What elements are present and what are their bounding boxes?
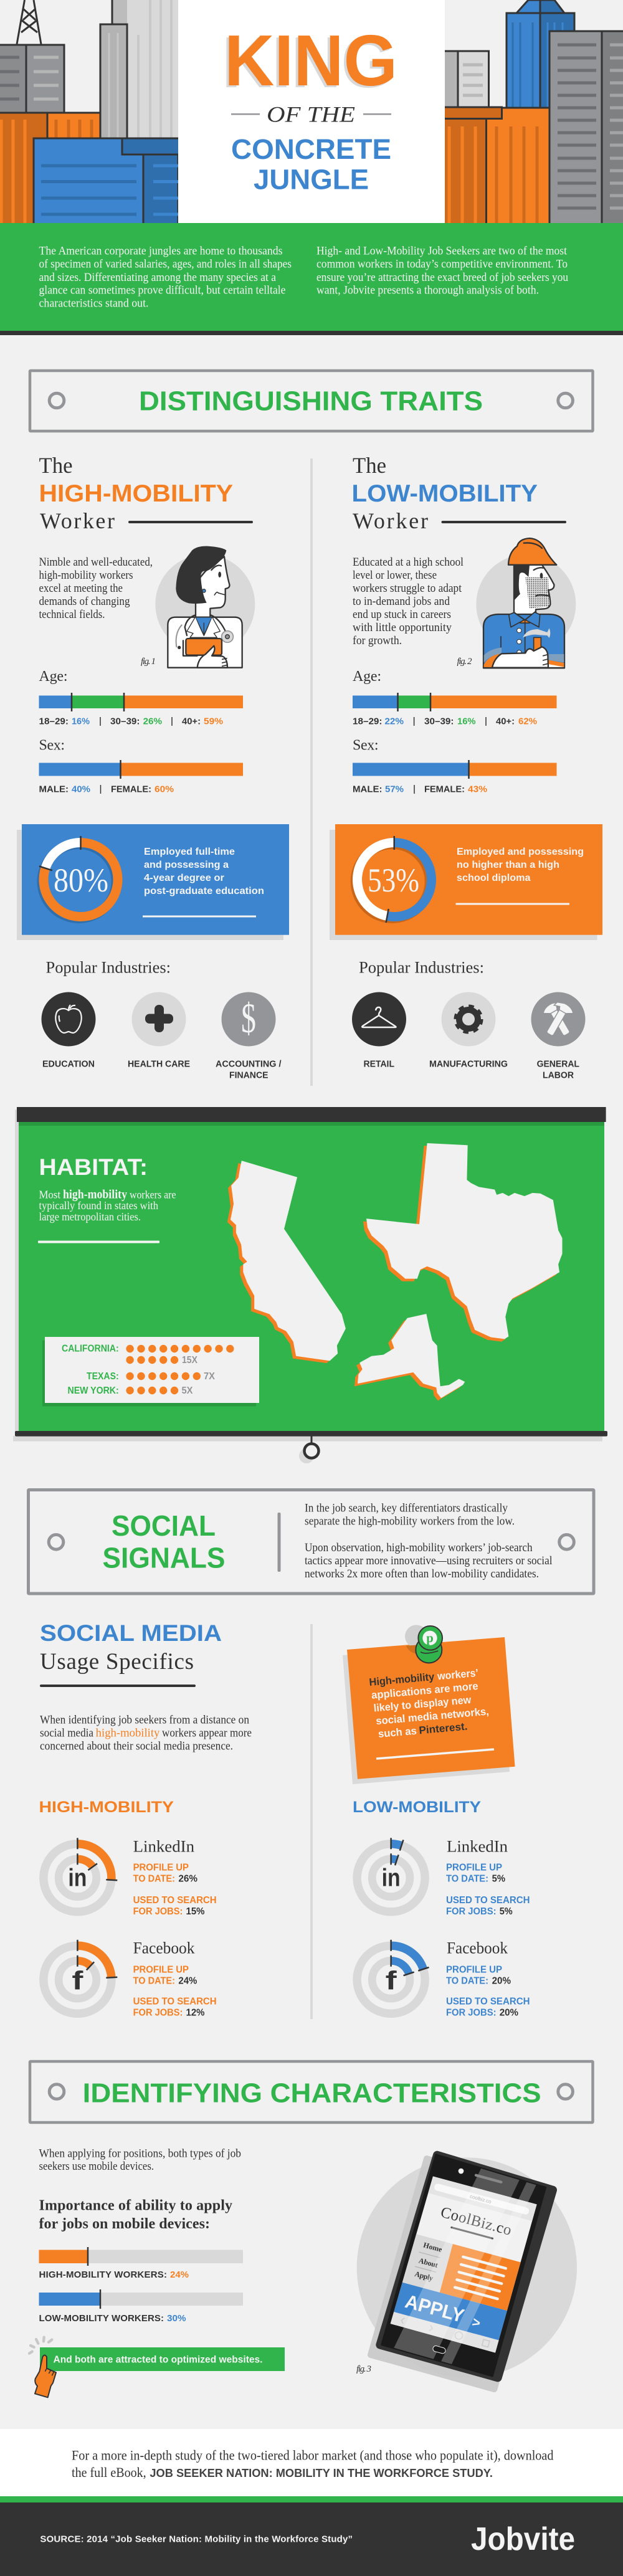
chart: high-mobility age: 40+: (182, 716, 201, 726)
text: low-mobility description (353, 556, 464, 647)
chart: low-mobility age (353, 668, 557, 726)
icon: pointing hand (29, 2337, 56, 2397)
donut: 53% (355, 836, 431, 923)
icon: construction worker illustration (476, 538, 576, 668)
stats: low-mobility linkedin: TO DATE: (446, 1874, 488, 1884)
text: diploma (457, 847, 584, 883)
text: social signals description (305, 1503, 552, 1580)
chart: low-mobility age: Age: (353, 668, 381, 685)
stats: high-mobility linkedin: TO DATE: (133, 1874, 175, 1884)
title: concrete jungle: CONCRETE (231, 133, 391, 165)
panel: social signals box (29, 1490, 594, 1594)
text: low-mobility description: level or lower, these (353, 569, 437, 582)
chart: mobile importance bars: LOW-MOBILITY WORKERS: (39, 2313, 164, 2324)
donut: 53%: 53% (368, 862, 419, 899)
chart: high-mobility age: 59% (204, 716, 223, 726)
icon: accounting dollar (222, 992, 275, 1047)
callout: optimized websites: And both are attracted to optimized websites. (54, 2355, 263, 2365)
gauge: low-mobility facebook (357, 1940, 429, 2013)
icon: manufacturing gear (441, 992, 496, 1047)
phone screen: > (470, 2314, 482, 2331)
industry labels right: GENERAL (537, 1060, 579, 1070)
stats: low-mobility facebook: 20% (492, 1976, 511, 1987)
stats: low-mobility linkedin: 5% (500, 1906, 513, 1917)
stats: high-mobility linkedin: USED TO SEARCH (133, 1895, 217, 1906)
text: social media description: When identifying job seekers from a distance on (40, 1714, 249, 1727)
industry labels right: RETAIL (364, 1060, 394, 1070)
gauge: high-mobility facebook (44, 1940, 117, 2013)
text: low-mobility description: Educated at a high school (353, 556, 464, 569)
caption: fig 1: fig. 1 (141, 657, 156, 667)
intro green band (0, 223, 623, 335)
icon: pinterest pin (405, 1625, 442, 1663)
icon: retail hanger (352, 992, 406, 1047)
legend: state counts: 5X (182, 1385, 193, 1396)
heading: social media usage specifics: Usage Specifics (40, 1649, 194, 1675)
panel: call to action: the full eBook, (72, 2464, 146, 2480)
text: note (369, 1666, 490, 1741)
legend: state counts: NEW YORK: (67, 1385, 119, 1396)
donut: 80% (39, 836, 118, 918)
text: high-mobility description: Nimble and well-educated, (39, 556, 153, 569)
header cityscape right (443, 0, 623, 226)
chart: high-mobility sex: MALE: (39, 784, 69, 794)
chart: mobile importance bars: HIGH-MOBILITY WORKERS: (39, 2269, 167, 2280)
panel: call to action: For a more in-depth study of the two-tiered labor market (and those who populate it), download (72, 2448, 553, 2463)
text: low-mobility description: with little opportunity (353, 622, 452, 634)
text: mobile intro (39, 2147, 241, 2173)
legend: state counts: 15X (182, 1355, 198, 1366)
chart: high-mobility age: 30–39: (110, 716, 140, 726)
text: social media description (40, 1714, 252, 1753)
text: high-mobility description: high-mobility workers (39, 569, 133, 582)
heading box: distinguishing traits (30, 371, 593, 431)
text: note: likely to display new (373, 1694, 472, 1714)
phone screen (390, 2177, 537, 2353)
stats: low-mobility facebook: 20% (500, 2008, 518, 2018)
intro text left: glance can sometimes prove difficult, but certain telltale (39, 284, 285, 297)
heading: the low-mobility worker: Worker (353, 508, 428, 533)
text: note: workers’ (436, 1667, 479, 1682)
map: texas (363, 1143, 562, 1342)
icon: general labor hammers (531, 992, 586, 1047)
heading: popular industries right: Popular Industries: (359, 959, 484, 977)
phone screen: coolbiz.co (469, 2193, 492, 2205)
title panel: KING (222, 22, 395, 103)
stats: high-mobility facebook: TO DATE: (133, 1976, 175, 1987)
icon: accounting dollar: $ (241, 994, 256, 1042)
stats: low-mobility linkedin: 5% (492, 1874, 505, 1884)
chart: high-mobility sex: Sex: (39, 738, 65, 754)
intro text right: common workers in today’s competitive environment. To (316, 258, 568, 270)
legend: state counts: 7X (204, 1371, 216, 1382)
chart: low-mobility age: 16% (457, 716, 476, 726)
heading box: identifying characteristics (30, 2061, 593, 2122)
legend: state counts (42, 1337, 259, 1407)
text: low-mobility description: workers struggle to adapt (353, 582, 462, 595)
intro text left: The American corporate jungles are home to thousands (39, 245, 283, 258)
industry labels right: MANUFACTURING (429, 1060, 508, 1070)
chart: low-mobility age: 30–39: (424, 716, 454, 726)
text: education: 4-year degree or (144, 873, 224, 883)
text: high-mobility description (39, 556, 153, 621)
icon: phone illustration (357, 2155, 577, 2389)
legend: state counts: TEXAS: (87, 1371, 119, 1382)
icon: education apple (41, 992, 96, 1047)
chart: mobile importance bars: 30% (167, 2313, 186, 2324)
text: social media description: concerned about their social media presence. (40, 1741, 233, 1753)
text: education (144, 847, 264, 896)
stats: low-mobility linkedin: PROFILE UP (446, 1863, 502, 1873)
text: habitat description: workers are (130, 1188, 176, 1200)
stats: low-mobility facebook: USED TO SEARCH (446, 1997, 530, 2007)
chart: low-mobility sex: FEMALE: (424, 784, 465, 794)
chart: low-mobility sex: 43% (468, 784, 487, 794)
text: note: applications are more (371, 1680, 478, 1701)
callout: pinterest note (343, 1625, 515, 1784)
text: diploma: Employed and possessing (457, 847, 584, 857)
stats: high-mobility facebook: FOR JOBS: (133, 2008, 183, 2018)
text: habitat description: high-mobility (63, 1187, 127, 1201)
gauge: high-mobility facebook: f (72, 1966, 84, 1995)
intro text left: characteristics stand out. (39, 298, 148, 310)
icon: pinterest pin: p (426, 1632, 434, 1645)
stats: low-mobility linkedin: USED TO SEARCH (446, 1895, 530, 1906)
panel: 53% diploma (330, 824, 602, 940)
chart: low-mobility age: 62% (518, 716, 537, 726)
intro text right: High- and Low-Mobility Job Seekers are two of the most (316, 245, 568, 258)
chart: high-mobility sex: 40% (72, 784, 90, 794)
text: social signals description: separate the high-mobility workers from the low. (305, 1516, 515, 1528)
phone screen: APPLY (403, 2291, 467, 2327)
heading: the low-mobility worker: The (353, 453, 386, 478)
text: mobile intro: When applying for positions, both types of job (39, 2147, 241, 2160)
map: california (227, 1161, 346, 1363)
heading: the high-mobility worker (39, 453, 253, 533)
heading: low-mobility social: LOW-MOBILITY (353, 1799, 481, 1816)
text: habitat description: Most (39, 1188, 60, 1200)
chart: low-mobility sex (353, 738, 557, 794)
stats: low-mobility linkedin (446, 1838, 530, 1917)
phone glare (394, 2167, 537, 2366)
heading box: identifying characteristics: IDENTIFYING CHARACTERISTICS (83, 2078, 541, 2108)
chart: low-mobility age: 22% (384, 716, 404, 726)
stats: low-mobility facebook: TO DATE: (446, 1976, 488, 1987)
gauge: low-mobility linkedin: in (382, 1864, 401, 1891)
stats: high-mobility facebook: 24% (178, 1976, 197, 1987)
text: note: social media networks, (376, 1705, 490, 1727)
title: of the: OF THE (267, 102, 355, 127)
text: mobile intro: seekers use mobile devices. (39, 2160, 154, 2173)
title: King: KING (224, 20, 397, 101)
footer: SOURCE: 2014 “Job Seeker Nation: Mobility in the Workforce Study” (40, 2534, 353, 2545)
stats: high-mobility linkedin: FOR JOBS: (133, 1906, 183, 1917)
text: note: such as (378, 1725, 417, 1740)
heading box: distinguishing traits: DISTINGUISHING TRAITS (139, 386, 483, 416)
stats: high-mobility facebook: Facebook (133, 1939, 194, 1957)
header cityscape left (0, 0, 181, 231)
chart: high-mobility age (39, 668, 243, 726)
screen pull ring (299, 1436, 319, 1463)
phone screen: Apply (414, 2269, 434, 2283)
chart: high-mobility age: 26% (143, 716, 162, 726)
stats: high-mobility linkedin: 26% (178, 1874, 197, 1884)
heading: the low-mobility worker: LOW-MOBILITY (351, 480, 538, 507)
text: note: Pinterest. (419, 1721, 468, 1736)
chart: high-mobility sex: 60% (155, 784, 174, 794)
heading: social signals: SIGNALS (102, 1542, 226, 1574)
stats: high-mobility linkedin: 15% (186, 1906, 205, 1917)
chart: high-mobility sex (39, 738, 243, 794)
heading: habitat: HABITAT: (39, 1154, 148, 1180)
intro text left: and sizes. Differentiating among the many species at a (39, 272, 276, 284)
heading: high-mobility social: HIGH-MOBILITY (39, 1799, 174, 1816)
text: low-mobility description: to in-demand jobs and (353, 596, 450, 608)
text: social media description: social media (40, 1728, 93, 1740)
stats: high-mobility facebook (133, 1939, 217, 2018)
heading: social signals (102, 1509, 226, 1574)
text: education: post-graduate education (144, 886, 264, 896)
text: social media description: high-mobility (96, 1728, 160, 1740)
industry labels left (42, 1060, 282, 1081)
text: habitat description (39, 1187, 176, 1223)
stats: high-mobility linkedin: PROFILE UP (133, 1863, 189, 1873)
panel: call to action (0, 2429, 623, 2496)
industry labels left: FINANCE (229, 1071, 269, 1081)
text: high-mobility description: demands of changing (39, 596, 130, 608)
heading: popular industries left: Popular Industries: (46, 959, 171, 977)
gauge: high-mobility linkedin: in (68, 1864, 87, 1891)
stats: low-mobility linkedin: FOR JOBS: (446, 1906, 496, 1917)
text: diploma: no higher than a high (457, 860, 559, 870)
text: low-mobility description: for growth. (353, 635, 402, 647)
icon: doctor illustration (155, 546, 255, 668)
heading: social media usage specifics: SOCIAL MEDIA (40, 1620, 222, 1646)
chart: low-mobility sex: Sex: (353, 738, 379, 754)
text: low-mobility description: end up stuck in careers (353, 609, 451, 621)
stats: high-mobility linkedin: LinkedIn (133, 1838, 194, 1856)
chart: low-mobility age: 18–29: (353, 716, 383, 726)
text: note: High-mobility (369, 1671, 435, 1688)
stats: high-mobility facebook: 12% (186, 2008, 205, 2018)
text: social signals description: networks 2x more often than low-mobility candidates. (305, 1568, 539, 1580)
text: habitat description: typically found in states with (39, 1199, 158, 1212)
chart: high-mobility age: Age: (39, 668, 67, 685)
intro text left (39, 245, 292, 310)
caption: fig 3: fig. 3 (356, 2364, 371, 2374)
gauge: high-mobility linkedin (44, 1838, 117, 1912)
panel: call to action: JOB SEEKER NATION: MOBILITY IN THE WORKFORCE STUDY. (150, 2466, 493, 2479)
panel: habitat screen (13, 1107, 607, 1463)
gauge: low-mobility facebook: f (386, 1966, 397, 1995)
heading: social media usage specifics (40, 1620, 222, 1687)
heading: importance: for jobs on mobile devices: (39, 2216, 210, 2232)
gauge: low-mobility linkedin (357, 1838, 425, 1912)
heading: the low-mobility worker (351, 453, 566, 533)
title: concrete jungle (231, 133, 391, 196)
industry labels right: LABOR (543, 1071, 574, 1081)
heading: importance (39, 2198, 232, 2232)
stats: low-mobility facebook: FOR JOBS: (446, 2008, 496, 2018)
chart: high-mobility age: 18–29: (39, 716, 69, 726)
industry labels left: EDUCATION (42, 1060, 95, 1070)
text: social signals description: tactics appear more innovative—using recruiters or social (305, 1555, 552, 1567)
chart: mobile importance bars (39, 2247, 243, 2324)
donut: 80%: 80% (54, 862, 108, 899)
text: social signals description: In the job search, key differentiators drastically (305, 1503, 508, 1515)
map: new york (354, 1314, 465, 1400)
text: high-mobility description: technical fields. (39, 609, 105, 621)
text: education: Employed full-time (144, 847, 235, 857)
stats: low-mobility linkedin: LinkedIn (447, 1838, 508, 1856)
industry labels left: HEALTH CARE (128, 1060, 190, 1070)
text: high-mobility description: excel at meeting the (39, 582, 123, 595)
industry labels right (364, 1060, 579, 1081)
chart: high-mobility age: 16% (72, 716, 90, 726)
industry labels left: ACCOUNTING / (216, 1060, 282, 1070)
heading: the high-mobility worker: HIGH-MOBILITY (39, 480, 233, 507)
legend: state counts: CALIFORNIA: (62, 1344, 119, 1354)
footer (0, 2496, 623, 2576)
callout: optimized websites (40, 2347, 285, 2371)
intro text right: ensure you’re attracting the exact breed of job seekers you (316, 272, 568, 284)
chart: low-mobility age: 40+: (496, 716, 515, 726)
intro text right: want, Jobvite presents a thorough analysis of both. (316, 284, 539, 297)
chart: mobile importance bars: 24% (170, 2269, 189, 2280)
title panel (178, 0, 445, 223)
text: education: and possessing a (144, 860, 229, 870)
phone screen: About (418, 2256, 439, 2269)
stats: low-mobility facebook (446, 1939, 530, 2018)
intro text right (316, 245, 568, 297)
phone screen: CoolBiz.co (439, 2203, 513, 2239)
heading: social signals: SOCIAL (112, 1509, 216, 1542)
caption: fig 2: fig. 2 (457, 657, 472, 667)
heading: the high-mobility worker: The (39, 453, 72, 478)
chart: high-mobility sex: FEMALE: (111, 784, 151, 794)
intro text left: of specimen of varied salaries, ages, and roles in all shapes (39, 258, 292, 270)
title: concrete jungle: JUNGLE (254, 163, 369, 196)
text: diploma: school diploma (457, 873, 531, 883)
chart: low-mobility sex: MALE: (353, 784, 383, 794)
logo: Jobvite: Jobvite (471, 2521, 575, 2557)
heading: the high-mobility worker: Worker (40, 508, 115, 533)
phone screen: Home (422, 2240, 444, 2254)
text: habitat description: large metropolitan cities. (39, 1210, 141, 1223)
stats: low-mobility facebook: Facebook (447, 1939, 508, 1957)
stats: high-mobility facebook: PROFILE UP (133, 1965, 189, 1975)
stats: high-mobility facebook: USED TO SEARCH (133, 1997, 217, 2007)
text: social signals description: Upon observation, high-mobility workers’ job-search (305, 1542, 533, 1554)
heading: importance: Importance of ability to apply (39, 2198, 232, 2214)
chart: low-mobility sex: 57% (385, 784, 404, 794)
icon: health care plus (132, 992, 186, 1047)
stats: low-mobility facebook: PROFILE UP (446, 1965, 502, 1975)
stats: high-mobility linkedin (133, 1838, 217, 1917)
panel: 80% education (17, 824, 289, 940)
text: social media description: workers appear more (162, 1728, 252, 1740)
